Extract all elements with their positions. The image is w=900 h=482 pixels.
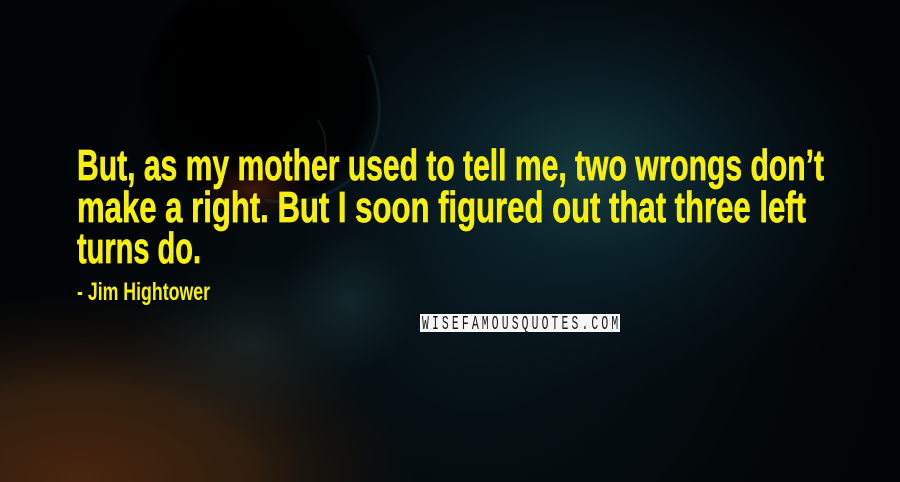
attribution: - Jim Hightower	[77, 278, 210, 306]
watermark: wisefamousquotes.com: WISEFAMOUSQUOTES.COM	[422, 313, 618, 335]
quote line 3: turns do.	[77, 224, 201, 273]
planet silhouette with rim light	[135, 0, 385, 230]
quote text	[77, 141, 824, 273]
